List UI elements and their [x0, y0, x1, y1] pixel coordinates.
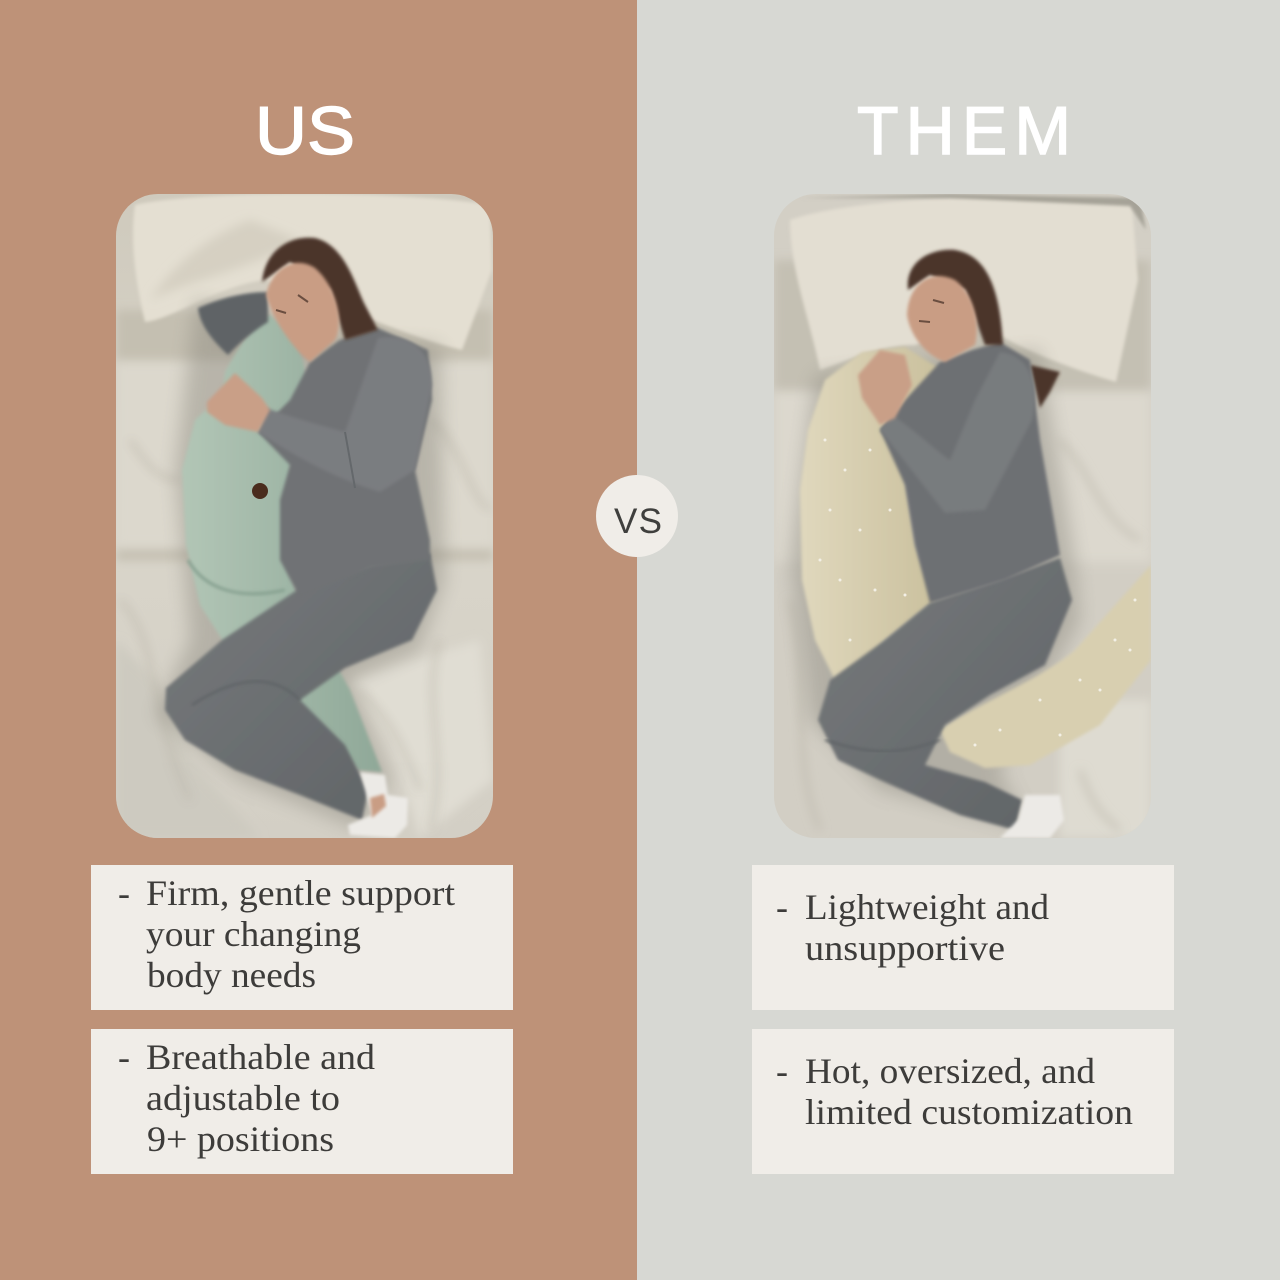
body shadow	[155, 300, 445, 830]
far arm	[198, 292, 268, 355]
face	[907, 276, 977, 362]
torso	[880, 342, 1060, 603]
panel: us background	[0, 0, 637, 1280]
green body pillow	[182, 315, 382, 772]
photo: woman sleeping with beige U-shaped pillow	[774, 194, 1151, 838]
foot	[1000, 795, 1064, 838]
callout: us firm support: Firm, gentle support	[146, 873, 455, 913]
pillow	[790, 197, 1138, 382]
callout: them hot oversized: limited customization	[805, 1092, 1133, 1132]
callout: them lightweight: Lightweight and	[805, 887, 1049, 927]
callout: them lightweight: unsupportive	[805, 928, 1005, 968]
body pillow	[800, 347, 945, 690]
callout: them lightweight: -	[776, 887, 788, 927]
callout: us breathable	[91, 1029, 513, 1174]
near arm	[258, 337, 432, 492]
callout: them hot oversized	[752, 1029, 1174, 1174]
vs badge: VS	[614, 502, 662, 541]
callout: us firm support: -	[118, 873, 130, 913]
foot	[348, 772, 408, 838]
callout: us breathable: -	[118, 1037, 130, 1077]
near arm	[880, 352, 1035, 513]
callout: us breathable: adjustable to	[146, 1078, 340, 1118]
body pillow tail	[940, 565, 1151, 768]
callout: us firm support	[91, 865, 513, 1010]
callout: us firm support: your changing	[146, 914, 361, 954]
torso	[258, 328, 432, 598]
callout: us breathable: 9+ positions	[147, 1119, 334, 1159]
hair	[908, 250, 1003, 345]
callout: us breathable: Breathable and	[146, 1037, 375, 1077]
panel: them background	[637, 0, 1280, 1280]
callout: us firm support: body needs	[147, 955, 316, 995]
legs	[818, 558, 1072, 830]
vs badge	[596, 475, 678, 557]
hair	[262, 238, 378, 340]
heading: US: US	[255, 93, 355, 169]
pillow	[133, 194, 492, 350]
ponytail	[1030, 365, 1060, 408]
photo: woman sleeping with green support pillow	[116, 194, 493, 838]
hand	[207, 373, 270, 432]
heading: THEM: THEM	[857, 93, 1071, 169]
face	[266, 263, 339, 362]
hand	[858, 350, 912, 425]
callout: them hot oversized: Hot, oversized, and	[805, 1051, 1095, 1091]
callout: them lightweight	[752, 865, 1174, 1010]
callout: them hot oversized: -	[776, 1051, 788, 1091]
body shadow	[790, 350, 1080, 830]
legs	[165, 553, 437, 820]
